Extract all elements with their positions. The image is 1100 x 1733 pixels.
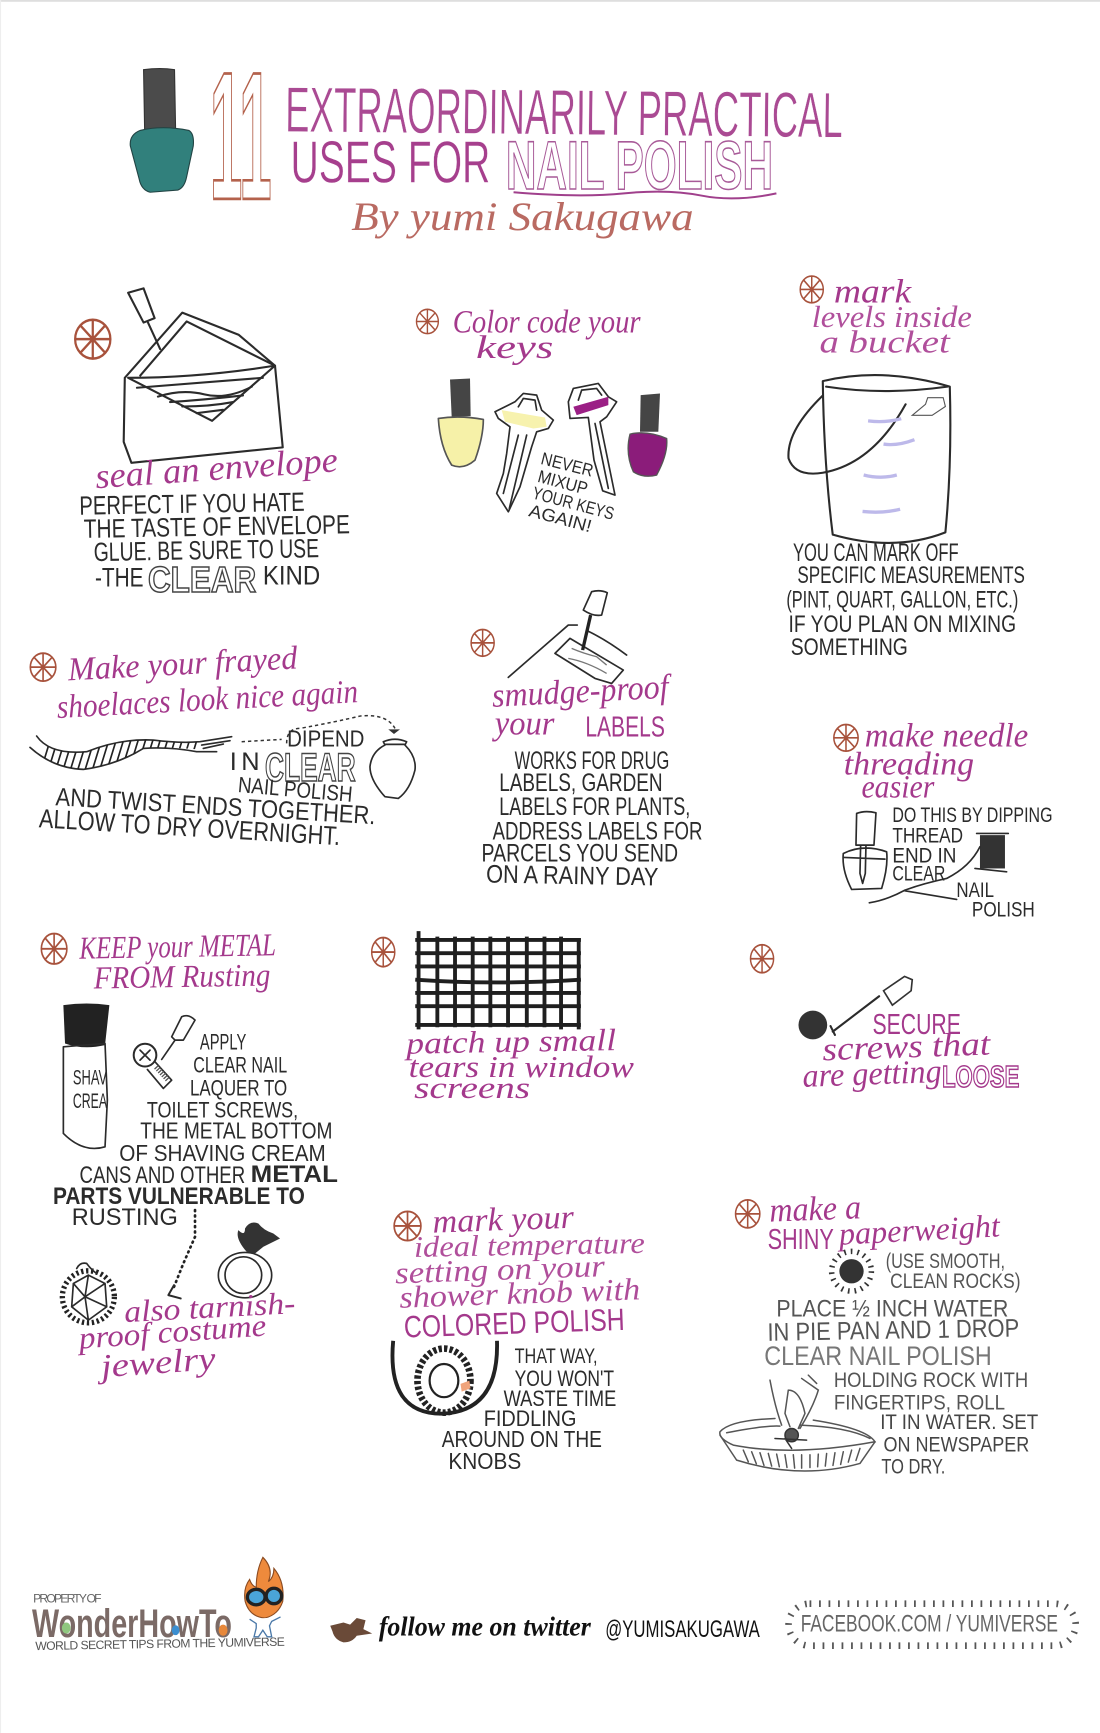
icon: clear bottle	[843, 812, 887, 889]
body text	[482, 747, 702, 892]
body text: OF SHAVING CREAM	[119, 1140, 326, 1166]
tip: frayed shoelaces	[30, 639, 415, 851]
body text: THE TASTE OF ENVELOPE	[84, 509, 350, 544]
heading	[812, 273, 972, 359]
heading: smudge-proof	[491, 667, 674, 715]
heading: SECURE	[872, 1009, 961, 1041]
can label: SHAV	[73, 1067, 107, 1090]
body text: ON NEWSPAPER	[884, 1433, 1029, 1456]
instruction text	[38, 726, 376, 851]
note	[886, 1250, 1020, 1293]
body text: THAT WAY,	[515, 1345, 597, 1368]
heading: a bucket	[819, 323, 951, 359]
icon: window screen grid	[415, 931, 581, 1029]
icon: yellow polish	[438, 378, 483, 467]
body text: LABELS FOR PLANTS,	[499, 793, 690, 821]
heading: shower knob with	[399, 1271, 641, 1315]
heading: screws that	[822, 1025, 992, 1068]
title underline	[514, 192, 776, 198]
heading: make a	[769, 1188, 862, 1230]
body text: PERFECT IF YOU HATE	[79, 487, 305, 521]
note: (USE SMOOTH,	[886, 1250, 1005, 1273]
body text: END IN	[892, 845, 956, 868]
heading: paperweight	[836, 1207, 1002, 1252]
body text: LAQUER TO	[190, 1076, 287, 1101]
rosette	[834, 724, 858, 751]
heading: Make your frayed	[66, 639, 299, 688]
body text: GLUE. BE SURE TO USE	[93, 533, 319, 567]
heading: setting on your	[394, 1248, 606, 1290]
body text: ADDRESS LABELS FOR	[493, 817, 702, 845]
header: 11	[210, 34, 272, 238]
icon: frayed shoelace and bottle	[30, 716, 415, 798]
body text	[892, 804, 1053, 922]
icon: ring	[218, 1223, 280, 1298]
rosette	[800, 276, 823, 303]
rosette	[736, 1200, 760, 1228]
heading: FROM Rusting	[92, 956, 271, 996]
body text: SOMETHING	[791, 634, 908, 661]
icon: bird	[330, 1618, 372, 1642]
body text: KIND	[263, 560, 320, 590]
body text: THE METAL BOTTOM	[140, 1118, 332, 1144]
logo: WonderHowTo: PROPERTY OF	[33, 1592, 102, 1606]
icon: spool	[869, 833, 1008, 903]
note: CLEAN ROCKS)	[890, 1270, 1020, 1293]
title line 2: USES FOR	[290, 128, 490, 195]
body text: CANS AND OTHER	[80, 1162, 245, 1189]
tip: window screens	[372, 931, 634, 1105]
heading: shoelaces look nice again	[56, 673, 359, 726]
heading: KEEP your METAL	[78, 926, 276, 966]
icons: can and screw	[63, 1003, 195, 1148]
body text: CLEAR NAIL	[193, 1052, 287, 1077]
body text: IF YOU PLAN ON MIXING	[789, 611, 1016, 638]
body text	[79, 487, 350, 600]
rosette	[394, 1211, 421, 1241]
tip: shiny paperweight	[720, 1188, 1038, 1478]
icons: polishes and keys	[438, 378, 667, 512]
logo: WonderHowTo	[32, 1592, 285, 1653]
tip: mark levels inside a bucket	[786, 273, 1025, 661]
instruction text: CLEAR	[265, 746, 356, 790]
rosette	[751, 945, 774, 973]
body text: ON A RAINY DAY	[486, 861, 659, 892]
title outlined words: NAIL POLISH	[506, 127, 773, 204]
body text: TOILET SCREWS,	[147, 1098, 298, 1123]
body text: PARCELS YOU SEND	[482, 840, 678, 868]
heading	[844, 717, 1028, 805]
body text: WORKS FOR DRUG	[515, 747, 669, 775]
heading: make needle	[865, 717, 1028, 755]
heading: SHINY	[768, 1224, 834, 1256]
icon: shaving cream can	[63, 1003, 109, 1148]
note: MIXUP	[536, 466, 590, 499]
instruction text: NAIL POLISH	[237, 772, 354, 807]
note	[527, 448, 616, 536]
body text: WASTE TIME	[504, 1386, 616, 1411]
body text: APPLY	[200, 1029, 246, 1054]
body text: IN PIE PAN AND 1 DROP	[767, 1314, 1019, 1347]
can label: CREA	[73, 1090, 107, 1113]
icon: shower knob	[392, 1341, 497, 1414]
icon: bucket	[788, 375, 950, 543]
note: AGAIN!	[527, 500, 594, 536]
heading: LABELS	[585, 712, 665, 744]
heading: threading	[844, 745, 974, 782]
tip: needle threading	[834, 717, 1053, 922]
body text: PLACE ½ INCH WATER	[776, 1296, 1008, 1323]
icon: pie pan and hand	[720, 1375, 875, 1471]
body text: LABELS, GARDEN	[499, 769, 663, 797]
icon: parcel and brush	[508, 591, 627, 683]
body text: METAL	[251, 1161, 338, 1188]
rosette	[41, 934, 67, 964]
jewelry heading: also tarnish-	[123, 1285, 296, 1329]
body text: CLEAR	[148, 559, 256, 600]
icon: costume necklace	[62, 1263, 114, 1323]
heading: mark your	[432, 1199, 575, 1241]
arrow: dotted to jewelry	[168, 1210, 195, 1298]
heading	[78, 926, 276, 996]
heading: LOOSE	[942, 1059, 1019, 1094]
icon: flame mascot	[245, 1557, 283, 1637]
can label	[73, 1067, 107, 1113]
heading	[394, 1199, 645, 1345]
footer	[32, 1557, 1076, 1653]
icon: yellow key	[495, 393, 553, 512]
tip: seal an envelope	[75, 288, 350, 600]
icon: shiny rock	[832, 1251, 871, 1291]
heading: screens	[414, 1070, 530, 1105]
jewelry heading: jewelry	[95, 1340, 217, 1386]
icon: bottle and thread spool	[843, 812, 1008, 903]
icon: clear polish bottle	[370, 739, 415, 798]
body text	[442, 1345, 616, 1474]
instruction text: AND TWIST ENDS TOGETHER.	[55, 783, 376, 830]
icon: teal nail polish bottle	[130, 69, 193, 192]
heading	[802, 1009, 1019, 1095]
heading	[768, 1188, 1002, 1256]
body text: FINGERTIPS, ROLL	[834, 1391, 1005, 1414]
body text	[786, 539, 1025, 661]
body text: DO THIS BY DIPPING	[892, 804, 1053, 827]
heading: patch up small	[404, 1022, 616, 1061]
icon: purple polish	[628, 393, 667, 476]
icons: jewelry and arrow	[62, 1210, 280, 1323]
rosette	[372, 938, 395, 967]
body text: AROUND ON THE	[442, 1426, 602, 1452]
tip: smudge-proof labels	[471, 591, 702, 892]
body text: FIDDLING	[484, 1406, 577, 1431]
heading	[453, 304, 641, 366]
heading: seal an envelope	[94, 440, 339, 496]
heading: tears in window	[409, 1049, 634, 1084]
rosette	[416, 309, 438, 334]
tip: shower knob	[392, 1199, 645, 1474]
instruction text: ALLOW TO DRY OVERNIGHT.	[38, 803, 341, 851]
rosette	[75, 320, 110, 359]
body text	[53, 1029, 338, 1231]
logo: WonderHowTo: WonderHowTo	[32, 1602, 232, 1646]
body text: THREAD	[892, 825, 963, 848]
icon: purple key	[568, 383, 617, 495]
tip: color code your keys	[416, 304, 667, 536]
header	[130, 34, 843, 239]
icon: envelope	[124, 288, 283, 463]
icon: screw and brush	[798, 976, 912, 1039]
body text: RUSTING	[72, 1204, 178, 1231]
heading: keys	[476, 329, 553, 366]
logo: WonderHowTo: WORLD SECRET TIPS FROM THE YUMIVERSE	[35, 1635, 285, 1653]
rosette	[30, 653, 56, 681]
rosette	[471, 629, 494, 656]
heading	[56, 639, 359, 726]
twitter line	[379, 1611, 760, 1643]
instruction text: IN	[230, 748, 260, 776]
tip: keep metal from rusting	[41, 926, 338, 1386]
body text: NAIL	[956, 879, 994, 902]
byline: By yumi Sakugawa	[351, 195, 694, 239]
body text	[764, 1296, 1038, 1478]
heading: COLORED POLISH	[403, 1302, 625, 1345]
body text: HOLDING ROCK WITH	[834, 1369, 1028, 1392]
body text: POLISH	[972, 899, 1035, 922]
heading: your	[492, 705, 555, 743]
heading: ideal temperature	[414, 1227, 645, 1264]
body text: -THE	[95, 563, 144, 593]
instruction text: DIPEND	[287, 726, 364, 752]
jewelry heading	[75, 1285, 296, 1386]
heading: Color code your	[453, 304, 641, 341]
heading	[404, 1022, 634, 1105]
heading: easier	[861, 768, 934, 805]
heading: levels inside	[812, 299, 972, 334]
twitter line: follow me on twitter	[379, 1611, 591, 1642]
arrow: to bottle	[242, 716, 395, 743]
body text: YOU CAN MARK OFF	[793, 539, 959, 567]
jewelry heading: proof costume	[75, 1308, 268, 1356]
heading	[491, 667, 674, 744]
tip: secure loose screws	[751, 945, 1019, 1095]
facebook badge	[789, 1604, 1076, 1646]
heading: are getting	[802, 1053, 942, 1095]
body text: KNOBS	[448, 1448, 521, 1474]
body text: CLEAR	[892, 862, 945, 885]
body text: TO DRY.	[881, 1455, 945, 1478]
note: YOUR KEYS	[530, 483, 616, 524]
body text: IT IN WATER. SET	[880, 1411, 1038, 1434]
heading: mark	[834, 273, 912, 311]
body text: YOU WON'T	[515, 1366, 614, 1391]
note: NEVER	[539, 448, 595, 481]
twitter line: @YUMISAKUGAWA	[605, 1616, 760, 1643]
icon: screw and brush	[134, 1016, 195, 1088]
body text: CLEAR NAIL POLISH	[764, 1341, 992, 1371]
body text: PARTS VULNERABLE TO	[53, 1183, 305, 1210]
